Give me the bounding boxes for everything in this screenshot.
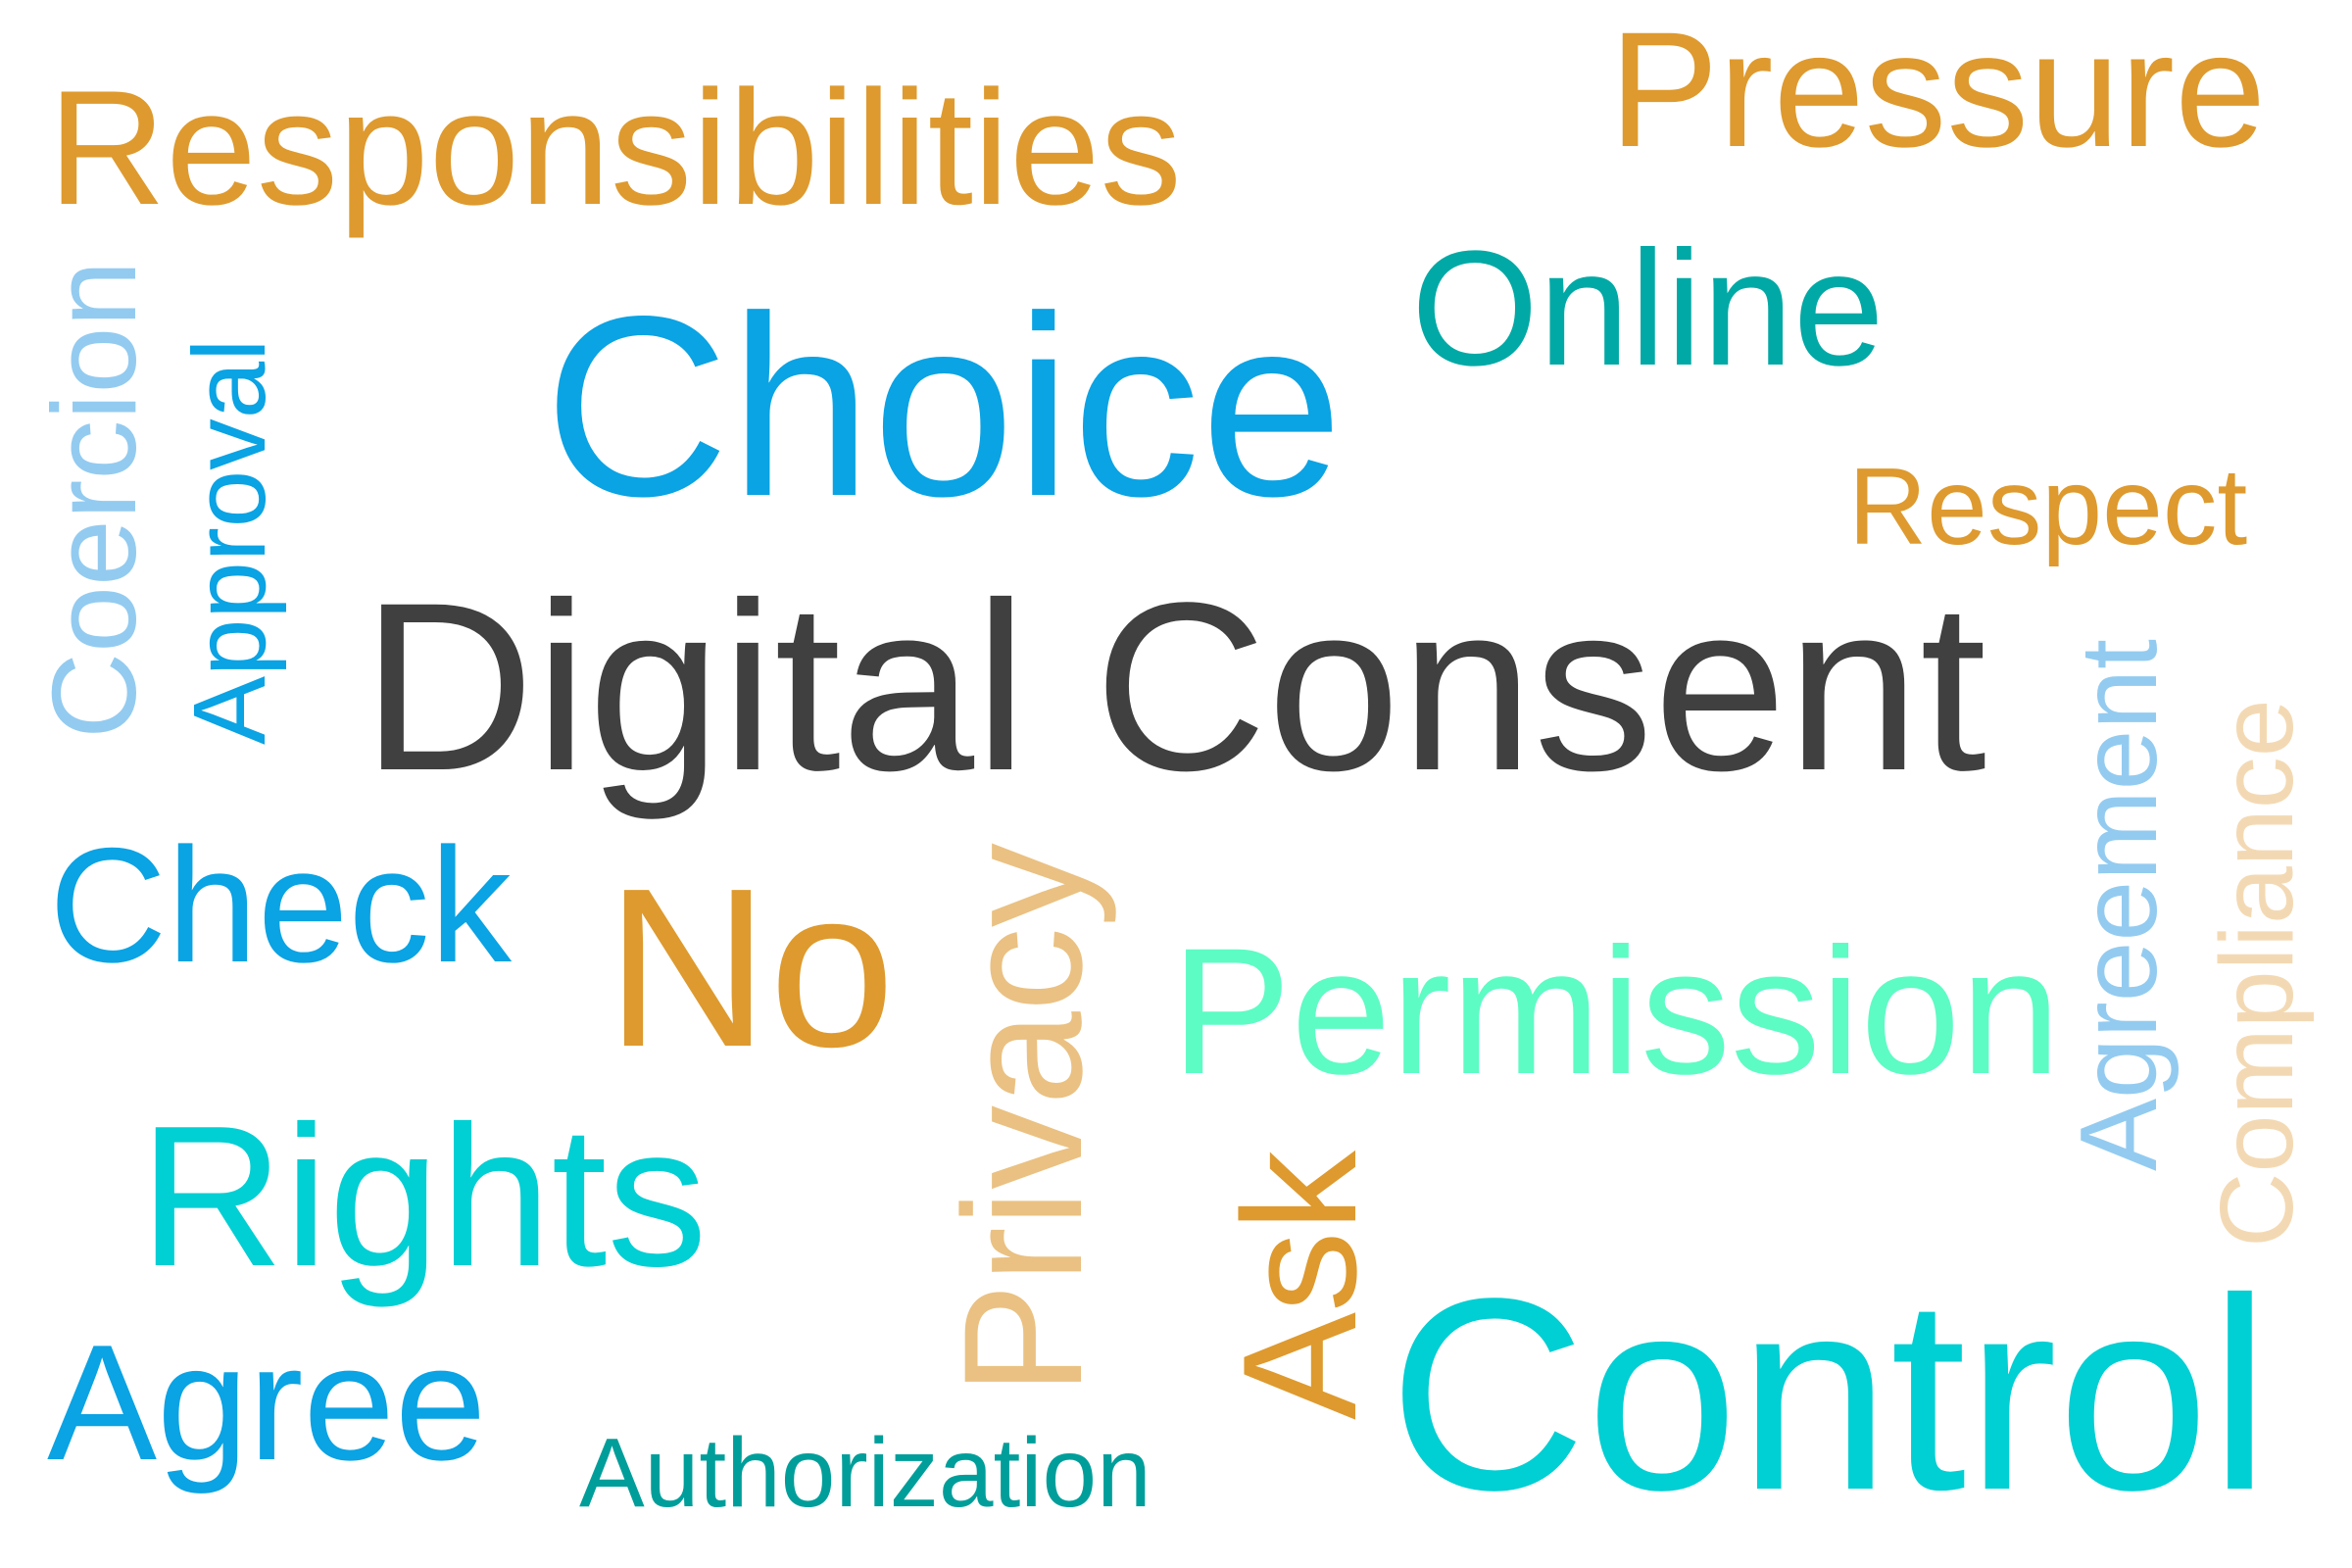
word: Choice: Choice (544, 263, 1344, 550)
word: No: No (606, 841, 895, 1094)
word: Control: Control (1389, 1242, 2270, 1547)
word: Rights: Rights (139, 1085, 708, 1308)
word: Digital Consent: Digital Consent (362, 553, 1986, 820)
word: Permission: Permission (1171, 910, 2061, 1111)
word: Authorization: Authorization (579, 1418, 1152, 1528)
word: Respect: Respect (1848, 446, 2247, 567)
word: Coercion: Coercion (27, 261, 161, 739)
word: Privacy: Privacy (929, 843, 1117, 1396)
word: Check: Check (49, 814, 513, 997)
word: Compliance: Compliance (2199, 699, 2315, 1248)
word: Online: Online (1411, 218, 1885, 400)
word: Pressure: Pressure (1609, 0, 2266, 181)
word: Approval: Approval (172, 339, 287, 745)
word: Agree: Agree (47, 1310, 486, 1494)
word: Responsibilities: Responsibilities (48, 57, 1182, 239)
word: Agreement: Agreement (2058, 639, 2180, 1171)
word: Ask: Ask (1209, 1150, 1390, 1420)
